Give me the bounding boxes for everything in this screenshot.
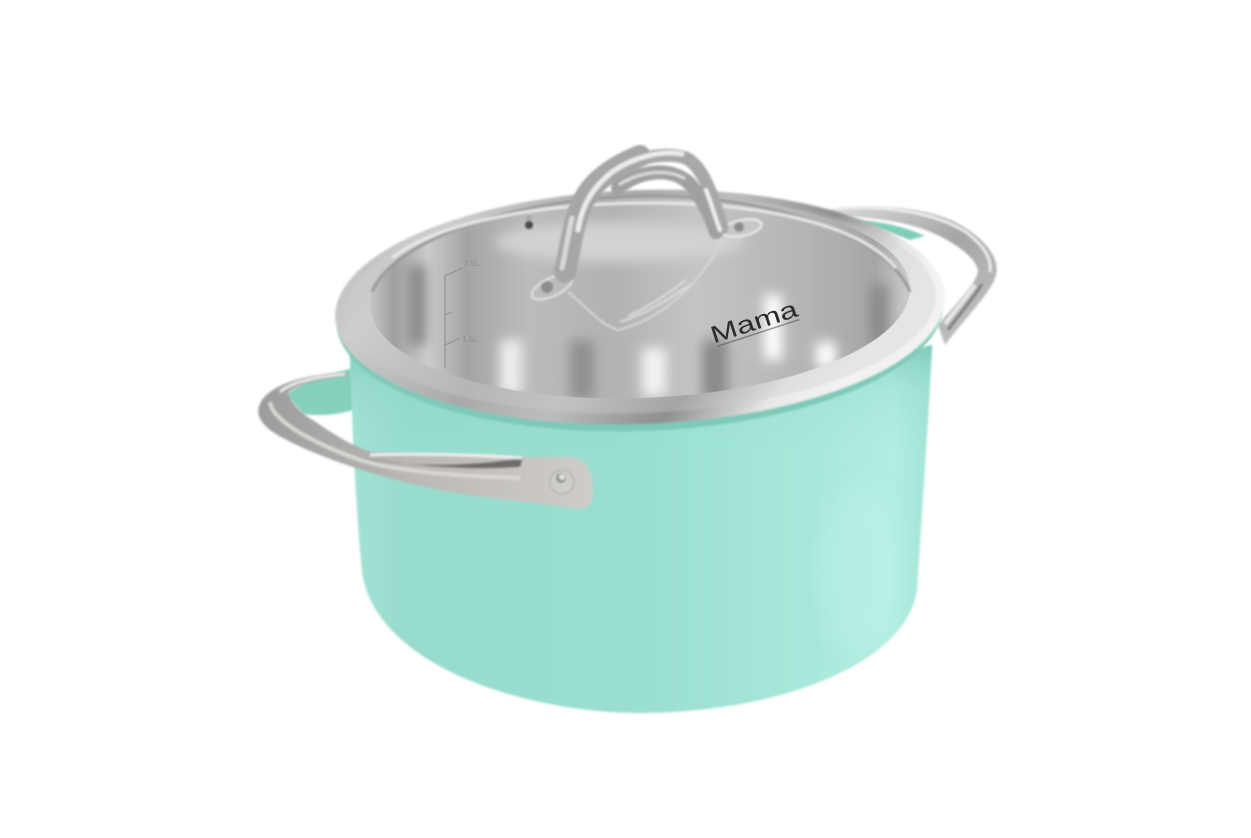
brand logo on lid: Mama [707, 295, 802, 349]
pot interior seen through glass lid [370, 214, 910, 398]
product illustration: mint cooking pot with glass lid [257, 144, 998, 714]
lid dome shape [568, 240, 722, 330]
glass lid edge [372, 196, 910, 292]
measuring scale marks: 2.5L [464, 259, 480, 268]
left handle mint bracket [286, 368, 358, 415]
pot body [350, 345, 932, 713]
left pot handle [258, 372, 593, 509]
measuring scale marks [445, 259, 480, 368]
right pot handle [828, 206, 997, 345]
lid steam vent [525, 215, 533, 229]
brand logo on lid [707, 295, 802, 349]
measuring scale marks: 1.5L [462, 335, 478, 344]
lid handle [528, 153, 763, 304]
pot rim [331, 179, 949, 442]
